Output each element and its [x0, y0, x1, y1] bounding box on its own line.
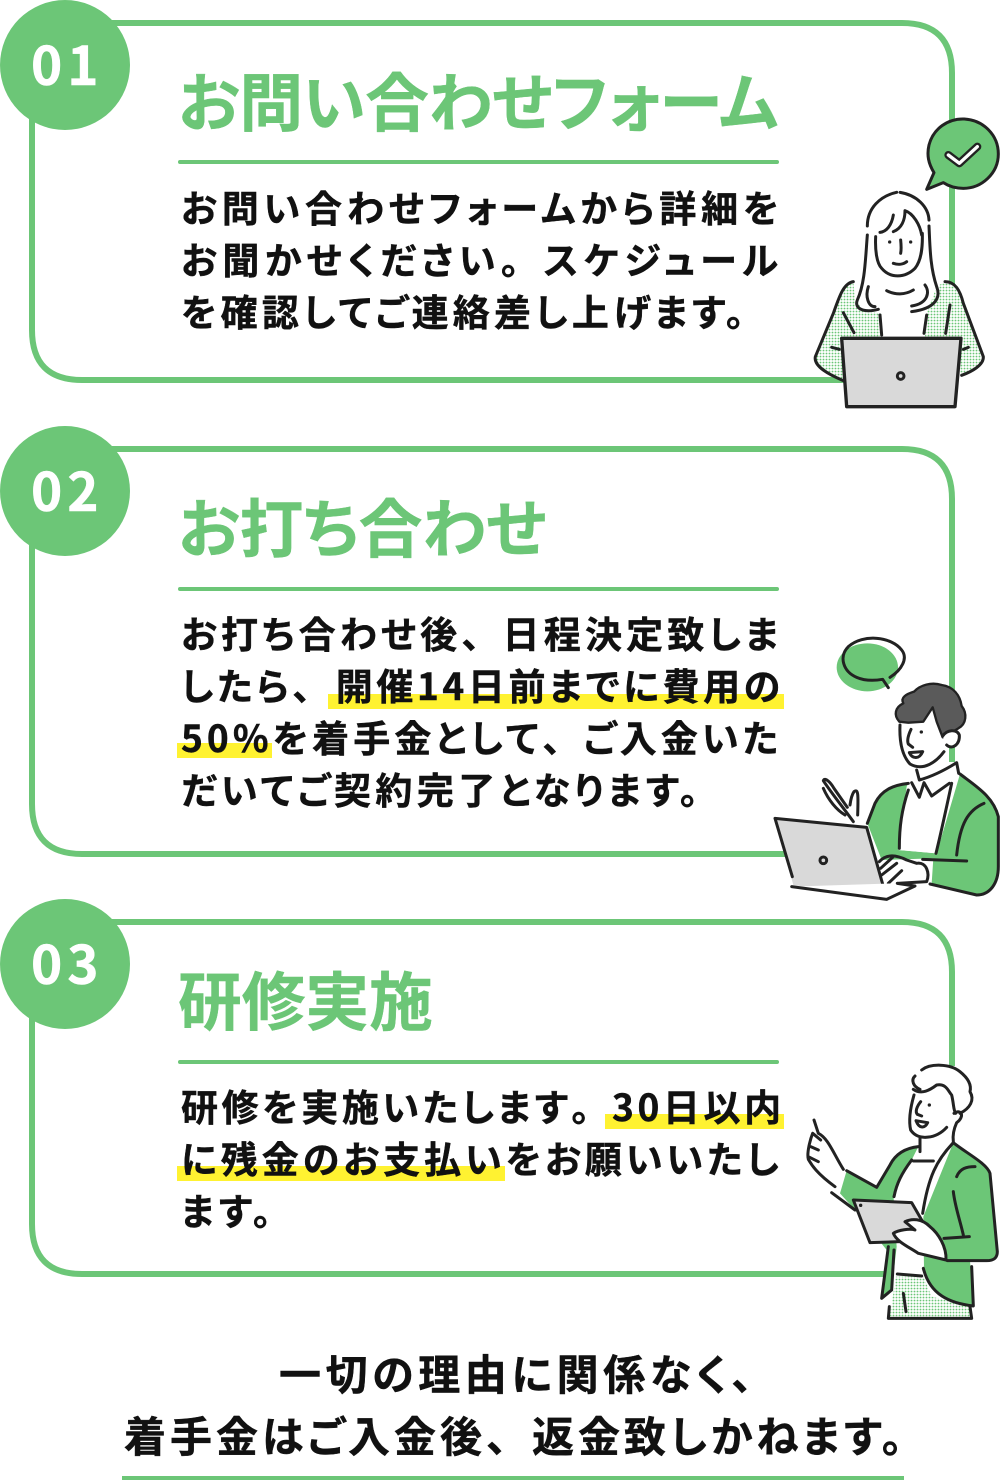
number badge 03: [0, 899, 130, 1029]
closing underline: [122, 1476, 904, 1480]
tablet: [853, 1200, 925, 1243]
text block: step 2: [181, 605, 784, 815]
figure lines: [808, 1065, 997, 1318]
laptop: [842, 338, 961, 407]
text block: step 1: を確認してご連絡差し上げます。: [181, 283, 748, 337]
number badge 02: 02: [31, 451, 104, 527]
text block: step 3: [181, 1078, 785, 1236]
panel: step 2: [0, 426, 998, 899]
icon: woman with laptop: [815, 119, 998, 407]
card outline 3: [32, 922, 952, 1274]
heading: step 3: 研修実施: [178, 952, 433, 1044]
closing note: 着手金はご入金後、返金致しかねます。: [124, 1404, 906, 1465]
shirt: [898, 763, 958, 853]
laptop: [775, 818, 915, 899]
jacket: [867, 774, 998, 895]
heading rule 1: [178, 160, 779, 164]
number badge 03: 03: [31, 924, 104, 1000]
text block: step 1: お問い合わせフォームから詳細を: [181, 179, 783, 233]
panel: step 1: [0, 0, 998, 407]
number badge 02: [0, 426, 130, 556]
highlight: 開催14日前までに費用の50%: [177, 694, 784, 758]
panel: step 3: [0, 899, 997, 1318]
text block: step 1: [181, 179, 784, 337]
card outline 2: [32, 449, 952, 854]
closing note: 一切の理由に関係なく、: [279, 1342, 757, 1403]
text block: step 2: だいてご契約完了となります。: [181, 761, 702, 815]
figure lines: [823, 725, 998, 895]
jacket: [840, 1143, 997, 1306]
heading: step 2: お打ち合わせ: [178, 479, 546, 571]
heading rule 3: [178, 1060, 779, 1064]
number badge 01: [0, 0, 130, 130]
text block: step 3: 研修を実施いたします。30日以内: [181, 1078, 785, 1132]
text block: step 2: したら、開催14日前までに費用の: [181, 657, 784, 711]
icon: man with laptop: [775, 638, 998, 899]
icon: man with tablet: [808, 1065, 997, 1318]
trousers: [889, 1277, 972, 1318]
text block: step 2: 50%を着手金として、ご入金いた: [181, 709, 782, 763]
speech bubble with check: [927, 119, 998, 189]
highlight: 30日以内に残金のお支払い: [177, 1114, 784, 1181]
heading: step 1: お問い合わせフォーム: [178, 53, 778, 145]
hair: [896, 684, 965, 737]
closing note: [122, 1342, 906, 1480]
text block: step 1: お聞かせください。スケジュール: [181, 231, 784, 285]
hand on tablet: [893, 1220, 946, 1260]
text block: step 3: に残金のお支払いをお願いいたし: [181, 1130, 783, 1184]
jacket: [815, 282, 983, 381]
card outline 1: [32, 23, 952, 380]
text block: step 2: お打ち合わせ後、日程決定致しま: [181, 605, 783, 659]
number badge 01: 01: [31, 25, 104, 101]
speech bubble: [837, 638, 904, 691]
text block: step 3: ます。: [181, 1182, 276, 1236]
heading rule 2: [178, 587, 779, 591]
figure lines: [815, 192, 983, 381]
